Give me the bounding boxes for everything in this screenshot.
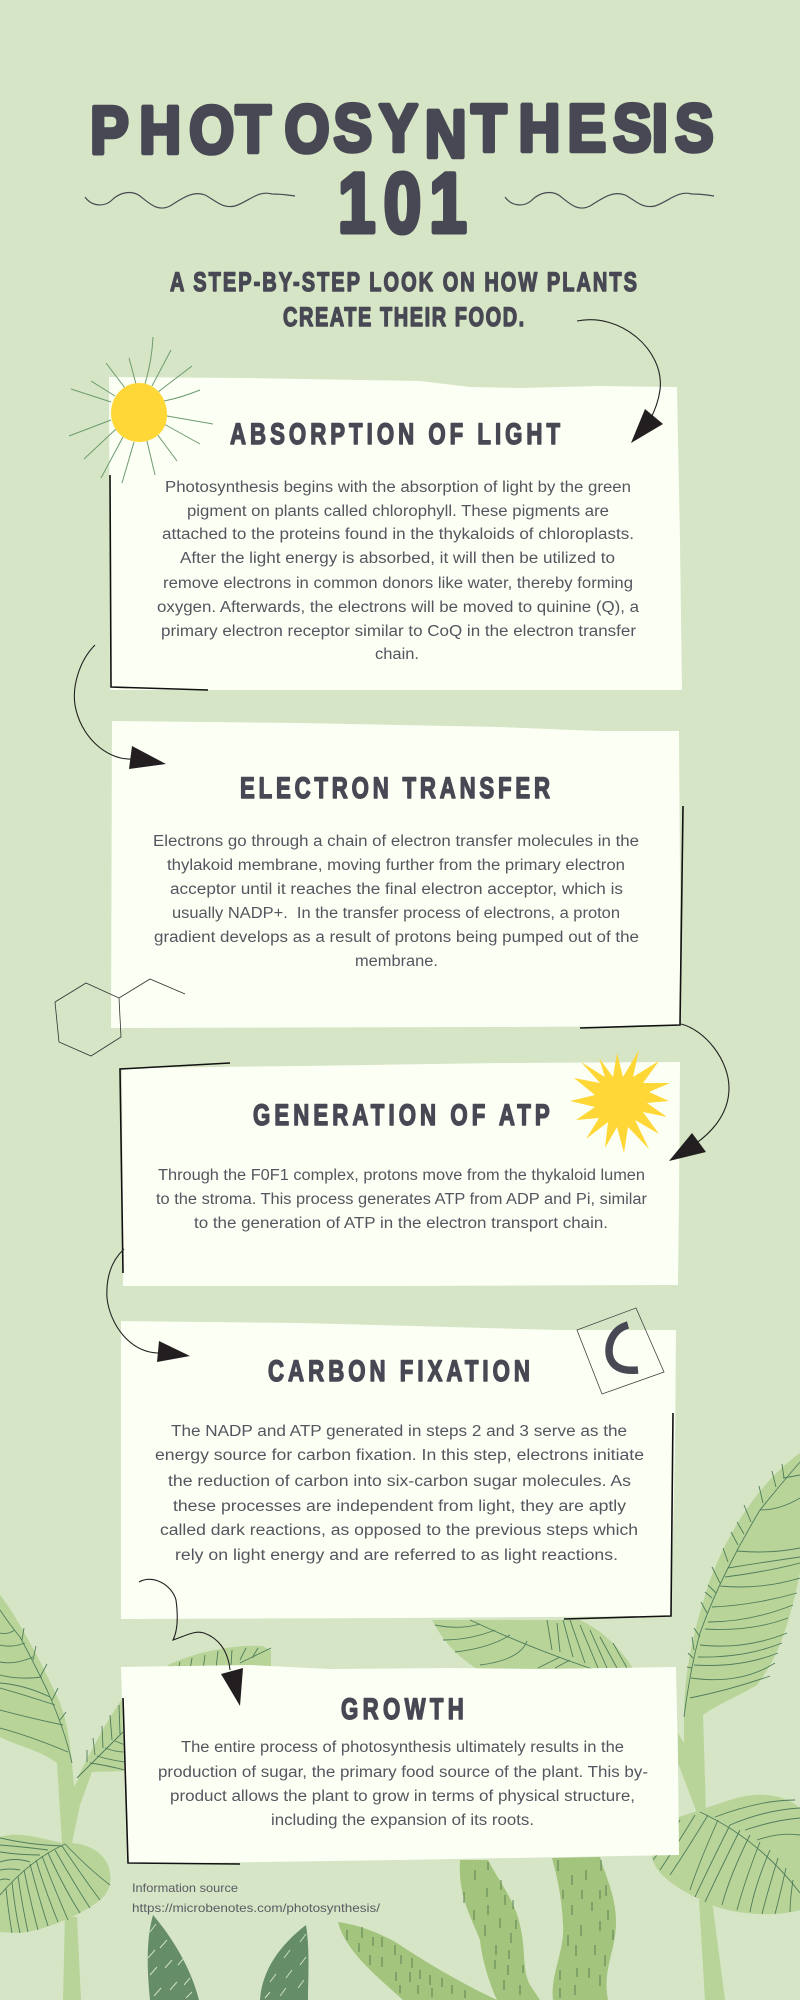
source note: https://microbenotes.com/photosynthesis/ (132, 1901, 381, 1915)
body text: absorption of light: pigment on plants called chlorophyll. These pigments are (187, 503, 609, 520)
panel: electron transfer (111, 721, 683, 1028)
plant: left lower leaf (0, 1835, 111, 1933)
body text: carbon fixation (155, 1423, 644, 1564)
icon: carbon element tile (577, 1308, 664, 1394)
subtitle (170, 267, 637, 333)
title (90, 91, 714, 251)
panel: absorption of light (109, 377, 682, 690)
panel: growth (121, 1665, 679, 1864)
icon: starburst sun (570, 1050, 670, 1153)
subtitle: A STEP-BY-STEP LOOK ON HOW PLANTS (170, 267, 637, 298)
arrow: carbon fixation to growth (139, 1579, 243, 1706)
body text: carbon fixation: these processes are independent from light, they are aptly (173, 1498, 626, 1515)
body text: electron transfer: membrane. (355, 953, 438, 970)
source note (132, 1881, 381, 1915)
plant: right lower leaf (652, 1795, 800, 1914)
heading: carbon fixation: CARBON FIXATION (268, 1354, 530, 1388)
arrow: electron transfer to generation of atp (669, 1024, 729, 1161)
arrow: absorption to electron transfer (74, 645, 166, 769)
body text: carbon fixation: The NADP and ATP generated in steps 2 and 3 serve as the (171, 1423, 627, 1440)
body text: absorption of light: remove electrons in common donors like water, thereby forming (163, 575, 633, 592)
body text: generation of atp: Through the F0F1 complex, protons move from the thykaloid lumen (158, 1167, 645, 1184)
body text: growth (158, 1739, 648, 1829)
body text: electron transfer: thylakoid membrane, moving further from the primary electron (167, 857, 625, 874)
icon: sun with rays (69, 337, 213, 483)
body text: absorption of light: attached to the proteins found in the thykaloids of chloroplasts. (162, 526, 634, 543)
plant: centre leaf behind growth panel (432, 1620, 634, 1672)
title line: 101: 101 (338, 157, 467, 251)
panel: generation of atp (120, 1062, 680, 1286)
heading: generation of atp: GENERATION OF ATP (253, 1098, 550, 1132)
body text: electron transfer: usually NADP+. In the transfer process of electrons, a proton (172, 905, 620, 922)
body text: growth: product allows the plant to grow in terms of physical structure, (170, 1788, 635, 1805)
body text: electron transfer: Electrons go through a chain of electron transfer molecules in the (153, 833, 639, 850)
heading: absorption of light: ABSORPTION OF LIGHT (230, 417, 560, 451)
body text: carbon fixation: the reduction of carbon into six-carbon sugar molecules. As (168, 1473, 631, 1490)
body text: generation of atp: to the generation of ATP in the electron transport chain. (194, 1215, 608, 1232)
body text: carbon fixation: energy source for carbon fixation. In this step, electrons initiate (155, 1447, 644, 1464)
heading: electron transfer: ELECTRON TRANSFER (240, 771, 550, 805)
icon: molecule hexagon (55, 979, 185, 1056)
body text: generation of atp: to the stroma. This process generates ATP from ADP and Pi, similar (156, 1191, 647, 1208)
panel: carbon fixation (121, 1321, 676, 1619)
plant: dark leaf right (260, 1925, 308, 2000)
body text: absorption of light: After the light energy is absorbed, it will then be utilized to (180, 550, 615, 567)
plant: small leaf left of growth panel (77, 1698, 125, 1778)
body text: absorption of light: oxygen. Afterwards, the electrons will be moved to quinine (Q), a (157, 599, 639, 616)
plant: medium leaf lower centre (338, 1922, 497, 2000)
body text: absorption of light: chain. (375, 646, 419, 663)
body text: growth: including the expansion of its roots. (271, 1812, 534, 1829)
plant: medium leaf right (552, 1857, 616, 2000)
body text: electron transfer: gradient develops as a result of protons being pumped out of the (154, 929, 639, 946)
subtitle: CREATE THEIR FOOD. (283, 302, 524, 333)
body text: carbon fixation: called dark reactions, as opposed to the previous steps which (160, 1522, 638, 1539)
heading: growth: GROWTH (341, 1692, 464, 1726)
wavy line: left (85, 193, 295, 208)
body text: electron transfer: acceptor until it reaches the final electron acceptor, which is (170, 881, 623, 898)
body text: growth: production of sugar, the primary food source of the plant. This by- (158, 1764, 648, 1781)
wavy line: right (505, 193, 714, 208)
body text: absorption of light: primary electron receptor similar to CoQ in the electron transfer (161, 623, 636, 640)
body text: absorption of light: Photosynthesis begins with the absorption of light by the green (165, 479, 631, 496)
title line: photosynthesis: PHOTOSYNTHESIS (90, 91, 714, 172)
body text: absorption of light (157, 479, 639, 663)
body text: generation of atp (156, 1167, 647, 1232)
plant: right tall plant with stem and large leaf (678, 1453, 800, 2000)
arrow: generation of atp to carbon fixation (107, 1249, 190, 1362)
plant: dark leaf left (148, 1915, 199, 2000)
plant: left tall plant with stem and large leaf (0, 1595, 92, 2000)
source note: Information source (132, 1881, 238, 1895)
body text: electron transfer (153, 833, 639, 970)
arrow: intro to absorption (577, 320, 663, 443)
plant: small leaf above growth panel (168, 1646, 271, 1670)
body text: carbon fixation: rely on light energy and are referred to as light reactions. (175, 1547, 618, 1564)
plant: medium leaf centre (460, 1860, 540, 2000)
body text: growth: The entire process of photosynthesis ultimately results in the (181, 1739, 624, 1756)
